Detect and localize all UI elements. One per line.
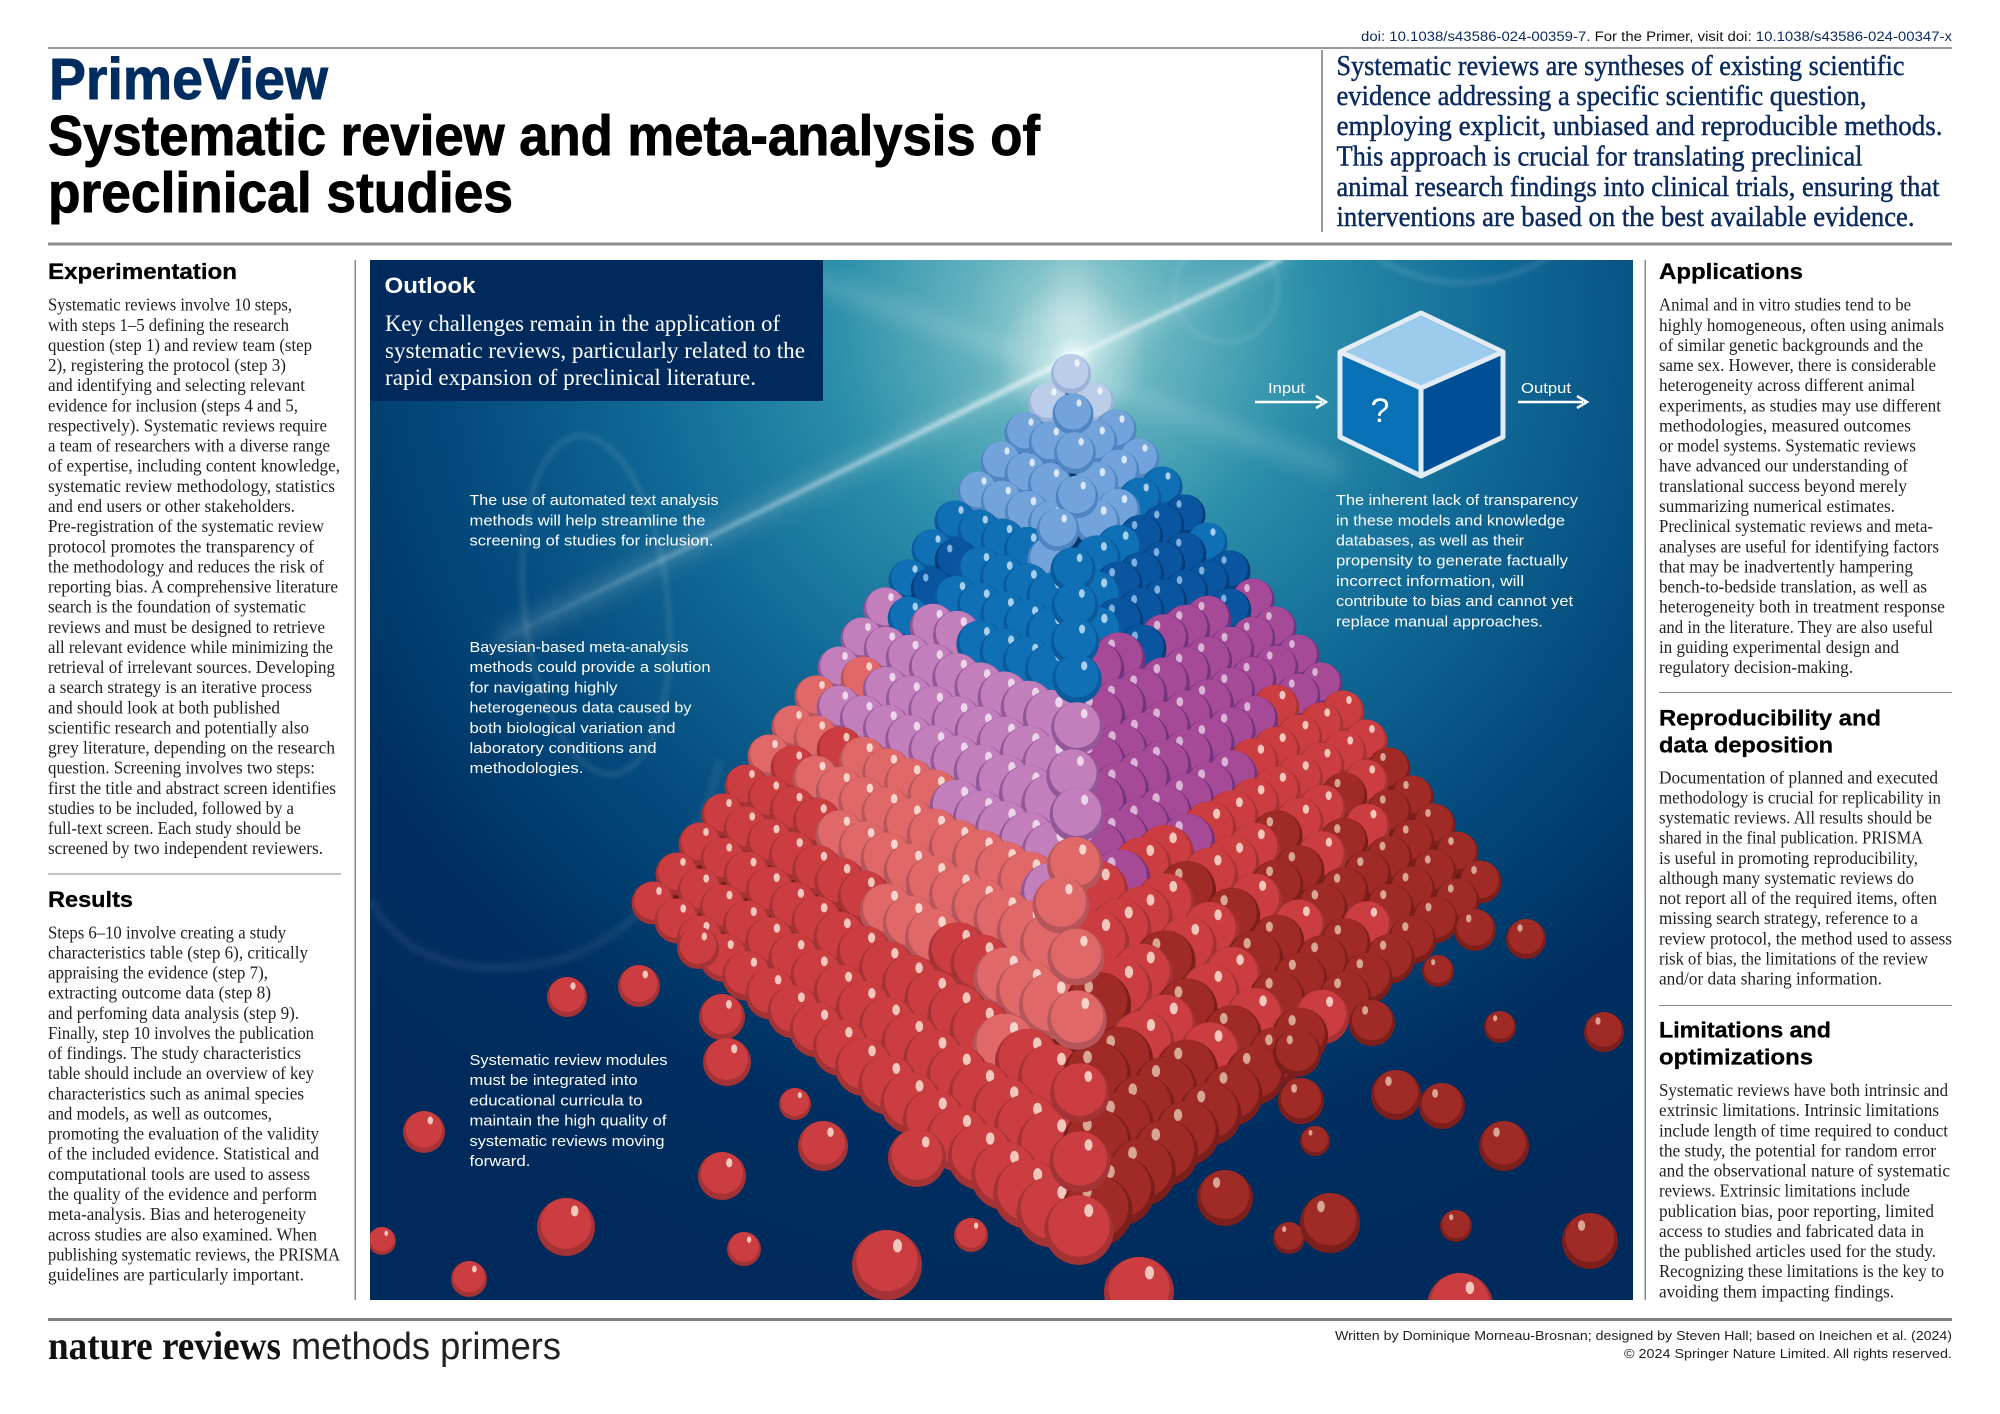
text: Experimentation: a team of researchers with a diverse range xyxy=(48,436,330,456)
summary text: interventions are based on the best available evidence. xyxy=(1336,202,1914,233)
text: Applications: methodologies, measured outcomes xyxy=(1659,416,1911,436)
annotation: Bayesian meta-analysis: laboratory conditions and xyxy=(470,740,656,757)
text: Experimentation: and should look at both published xyxy=(48,697,280,717)
text: Experimentation: a search strategy is an iterative process xyxy=(48,677,312,697)
kicker: PrimeView: PrimeView xyxy=(49,47,329,112)
black box icon xyxy=(1340,313,1503,476)
annotation: Bayesian meta-analysis: methods could provide a solution xyxy=(470,659,710,676)
text: Experimentation: reporting bias. A comprehensive literature xyxy=(48,576,338,596)
annotation: Bayesian meta-analysis: methodologies. xyxy=(470,760,584,777)
text: Experimentation: evidence for inclusion (steps 4 and 5, xyxy=(48,395,298,415)
text: Applications: analyses are useful for identifying factors xyxy=(1659,536,1939,556)
heading: Reproducibility and data deposition xyxy=(1659,706,1881,758)
left column xyxy=(48,259,341,1284)
heading: Experimentation: Experimentation xyxy=(48,259,237,284)
text: Applications: heterogeneity across different animal xyxy=(1659,375,1915,395)
text: Limitations: the study, the potential for random error xyxy=(1659,1140,1936,1160)
annotation: lack of transparency: incorrect information, will xyxy=(1336,573,1524,590)
text: Experimentation: retrieval of irrelevant sources. Developing xyxy=(48,657,335,677)
annotation: educational curricula: Systematic review modules xyxy=(470,1052,668,1069)
text: Limitations: and the observational nature of systematic xyxy=(1659,1160,1950,1180)
text: Experimentation: full-text screen. Each study should be xyxy=(48,818,301,838)
annotation: Bayesian meta-analysis: for navigating highly xyxy=(470,679,618,696)
footer credits: © 2024 Springer Nature Limited. All rights reserved. xyxy=(1624,1346,1952,1361)
text: Reproducibility: methodology is crucial for replicability in xyxy=(1659,787,1941,807)
annotation: automated text analysis: methods will help streamline the xyxy=(470,512,706,529)
main title: Systematic review and meta-analysis of xyxy=(48,104,1041,168)
footer logo: nature reviews xyxy=(48,1323,281,1368)
annotation: educational curricula xyxy=(470,1052,668,1170)
light rays and rings xyxy=(370,238,1560,968)
text: Reproducibility: Documentation of planned and executed xyxy=(1659,767,1938,787)
front ridge spheres xyxy=(1033,354,1114,1265)
black box icon: ? xyxy=(1371,392,1389,430)
heading: Applications: Applications xyxy=(1659,259,1803,284)
text: Experimentation: all relevant evidence while minimizing the xyxy=(48,637,333,657)
text: Reproducibility: shared in the final publication. PRISMA xyxy=(1659,828,1923,848)
text: Limitations: publication bias, poor reporting, limited xyxy=(1659,1201,1934,1221)
text: Results: of findings. The study characteristics xyxy=(48,1043,301,1063)
text: Experimentation: Pre-registration of the systematic review xyxy=(48,516,324,536)
text: Experimentation: first the title and abstract screen identifies xyxy=(48,778,336,798)
heading: Results: Results xyxy=(48,887,133,912)
annotation: lack of transparency: The inherent lack of transparency xyxy=(1336,492,1579,509)
text: Experimentation: studies to be included, followed by a xyxy=(48,798,294,818)
heading: Limitations and optimizations: Limitations and xyxy=(1659,1018,1831,1043)
text: Experimentation: with steps 1–5 defining the research xyxy=(48,315,289,335)
summary text: This approach is crucial for translating preclinical xyxy=(1336,142,1863,172)
text: Experimentation: question (step 1) and review team (step xyxy=(48,335,312,355)
text: Applications: experiments, as studies may use different xyxy=(1659,395,1941,415)
text: Results: computational tools are used to assess xyxy=(48,1164,310,1184)
output label and arrow xyxy=(1518,380,1587,408)
text: Limitations: Systematic reviews have both intrinsic and xyxy=(1659,1080,1948,1100)
annotation: educational curricula: must be integrated into xyxy=(470,1072,638,1089)
text: Limitations: avoiding them impacting findings. xyxy=(1659,1281,1894,1301)
text: Experimentation: reviews and must be designed to retrieve xyxy=(48,617,325,637)
text: Results: of the included evidence. Statistical and xyxy=(48,1144,319,1164)
text: Results: promoting the evaluation of the validity xyxy=(48,1124,319,1144)
text: Results: table should include an overview of key xyxy=(48,1063,314,1083)
annotation: Bayesian meta-analysis xyxy=(470,639,710,777)
panel background xyxy=(370,260,1633,1300)
text: Reproducibility: review protocol, the method used to assess xyxy=(1659,928,1952,948)
annotation: educational curricula: maintain the high quality of xyxy=(470,1113,667,1130)
text: Results: and models, as well as outcomes, xyxy=(48,1104,272,1124)
annotation: Bayesian meta-analysis: Bayesian-based meta-analysis xyxy=(470,639,688,656)
text: Experimentation: 2), registering the protocol (step 3) xyxy=(48,355,286,375)
annotation: automated text analysis: The use of automated text analysis xyxy=(470,492,718,509)
text: Experimentation: screened by two independent reviewers. xyxy=(48,838,323,858)
annotation: lack of transparency: databases, as well as their xyxy=(1336,532,1524,550)
text: Applications: translational success beyond merely xyxy=(1659,476,1907,496)
text: Applications: of similar genetic backgrounds and the xyxy=(1659,335,1923,355)
text: Reproducibility xyxy=(1659,767,1952,989)
text: Applications: Animal and in vitro studies tend to be xyxy=(1659,295,1911,315)
outlook text xyxy=(385,311,805,391)
annotation: automated text analysis: screening of studies for inclusion. xyxy=(470,532,714,550)
annotation: Bayesian meta-analysis: both biological variation and xyxy=(470,720,676,737)
main title: preclinical studies xyxy=(48,161,513,225)
input label and arrow xyxy=(1255,380,1326,408)
text: Experimentation: scientific research and potentially also xyxy=(48,717,309,737)
text: Results: and perfoming data analysis (step 9). xyxy=(48,1003,299,1023)
text: Applications: and in the literature. They are also useful xyxy=(1659,617,1933,637)
text: Reproducibility: is useful in promoting reproducibility, xyxy=(1659,848,1918,868)
text: Experimentation: respectively). Systematic reviews require xyxy=(48,416,327,436)
text: Experimentation xyxy=(48,295,340,858)
annotation: lack of transparency: contribute to bias and cannot yet xyxy=(1336,593,1574,610)
text: Experimentation: search is the foundation of systematic xyxy=(48,597,306,617)
text: Experimentation: and identifying and selecting relevant xyxy=(48,375,305,395)
text: Applications: that may be inadvertently hampering xyxy=(1659,556,1913,576)
input label and arrow: Input xyxy=(1268,380,1306,397)
summary text xyxy=(1336,51,1942,233)
footer logo xyxy=(48,1323,561,1368)
text: Results: the quality of the evidence and perform xyxy=(48,1184,317,1204)
text: Results: publishing systematic reviews, the PRISMA xyxy=(48,1244,340,1264)
output label and arrow: Output xyxy=(1521,380,1572,397)
heading: Limitations and optimizations xyxy=(1659,1018,1831,1070)
text: Results: Finally, step 10 involves the publication xyxy=(48,1023,314,1043)
text: Reproducibility: systematic reviews. All results should be xyxy=(1659,808,1932,828)
text: Applications: in guiding experimental design and xyxy=(1659,637,1899,657)
text: Applications: Preclinical systematic reviews and meta- xyxy=(1659,516,1933,536)
text: Experimentation: protocol promotes the transparency of xyxy=(48,536,314,556)
text: Reproducibility: risk of bias, the limitations of the review xyxy=(1659,948,1928,968)
text: Applications: heterogeneity both in treatment response xyxy=(1659,597,1945,617)
text: Reproducibility: and/or data sharing information. xyxy=(1659,969,1882,989)
outlook text: systematic reviews, particularly related to the xyxy=(385,338,805,364)
text: Applications: have advanced our understanding of xyxy=(1659,456,1908,476)
outlook box xyxy=(370,260,823,401)
annotation: lack of transparency xyxy=(1336,492,1579,630)
text: Results xyxy=(48,922,340,1284)
text: Reproducibility: missing search strategy, reference to a xyxy=(1659,908,1918,928)
summary text: animal research findings into clinical trials, ensuring that xyxy=(1336,172,1940,203)
red layers xyxy=(632,690,1502,1247)
right column xyxy=(1659,259,1952,1301)
text: Experimentation: question. Screening involves two steps: xyxy=(48,758,315,778)
pyramid of spheres xyxy=(632,354,1502,1265)
text: Applications: summarizing numerical estimates. xyxy=(1659,496,1895,516)
text: Results: Steps 6–10 involve creating a study xyxy=(48,922,286,942)
text: Experimentation: grey literature, depending on the research xyxy=(48,738,335,758)
outlook text: rapid expansion of preclinical literature. xyxy=(385,365,756,391)
annotation: lack of transparency: replace manual approaches. xyxy=(1336,613,1543,630)
text: Applications xyxy=(1659,295,1945,677)
text: Results: characteristics such as animal species xyxy=(48,1083,304,1103)
text: Applications: highly homogeneous, often using animals xyxy=(1659,315,1944,335)
text: Limitations xyxy=(1659,1080,1950,1301)
text: Limitations: the published articles used for the study. xyxy=(1659,1241,1936,1261)
text: Experimentation: and end users or other stakeholders. xyxy=(48,496,295,516)
footer logo: methods primers xyxy=(291,1326,561,1368)
annotation: automated text analysis xyxy=(470,492,718,550)
summary text: Systematic reviews are syntheses of existing scientific xyxy=(1336,51,1904,82)
summary text: evidence addressing a specific scientific question, xyxy=(1336,81,1866,112)
title block xyxy=(48,47,1041,225)
footer credits: Written by Dominique Morneau-Brosnan; designed by Steven Hall; based on Ineichen et al. (2024) xyxy=(1335,1328,1952,1343)
outlook text: Key challenges remain in the application of xyxy=(385,311,780,337)
annotation: lack of transparency: propensity to generate factually xyxy=(1336,553,1569,570)
text: Results: across studies are also examined. When xyxy=(48,1224,317,1244)
text: Results: guidelines are particularly important. xyxy=(48,1264,304,1284)
heading: Reproducibility and data deposition: data deposition xyxy=(1659,732,1833,758)
text: Results: characteristics table (step 6), critically xyxy=(48,942,308,962)
annotation: educational curricula: educational curricula to xyxy=(470,1092,642,1109)
text: Experimentation: of expertise, including content knowledge, xyxy=(48,456,340,476)
text: Applications: or model systems. Systematic reviews xyxy=(1659,436,1916,456)
annotation: educational curricula: systematic reviews moving xyxy=(470,1133,664,1150)
heading: Reproducibility and data deposition: Reproducibility and xyxy=(1659,706,1881,731)
summary text: employing explicit, unbiased and reproducible methods. xyxy=(1336,111,1942,142)
text: Reproducibility: although many systematic reviews do xyxy=(1659,868,1914,888)
footer credits xyxy=(1335,1328,1952,1361)
text: Results: extracting outcome data (step 8) xyxy=(48,983,271,1003)
text: Limitations: access to studies and fabricated data in xyxy=(1659,1221,1924,1241)
text: Experimentation: the methodology and reduces the risk of xyxy=(48,556,324,576)
annotation: lack of transparency: in these models and knowledge xyxy=(1336,512,1565,529)
text: Results: meta-analysis. Bias and heterogeneity xyxy=(48,1204,306,1224)
outlook heading: Outlook xyxy=(384,273,476,298)
text: Experimentation: systematic review methodology, statistics xyxy=(48,476,335,496)
text: Applications: bench-to-bedside translation, as well as xyxy=(1659,576,1927,596)
text: Limitations: extrinsic limitations. Intrinsic limitations xyxy=(1659,1100,1939,1120)
blue layers xyxy=(888,382,1250,658)
annotation: Bayesian meta-analysis: heterogeneous data caused by xyxy=(470,700,692,717)
text: Applications: same sex. However, there is considerable xyxy=(1659,355,1936,375)
doi line: doi: 10.1038/s43586-024-00359-7. For the Primer, visit doi: 10.1038/s43586-024-00347-x xyxy=(1361,29,1952,44)
purple layers xyxy=(794,578,1342,834)
text: Limitations: include length of time required to conduct xyxy=(1659,1120,1948,1140)
text: Limitations: reviews. Extrinsic limitations include xyxy=(1659,1181,1910,1201)
annotation: educational curricula: forward. xyxy=(470,1153,530,1170)
text: Experimentation: Systematic reviews involve 10 steps, xyxy=(48,295,292,315)
main title xyxy=(48,104,1041,225)
text: Limitations: Recognizing these limitations is the key to xyxy=(1659,1261,1944,1281)
loose red spheres xyxy=(368,909,1624,1339)
heading: Limitations and optimizations: optimizations xyxy=(1659,1044,1813,1070)
text: Results: appraising the evidence (step 7), xyxy=(48,963,268,983)
panel: outlook illustration xyxy=(368,238,1633,1339)
text: Applications: regulatory decision-making. xyxy=(1659,657,1853,677)
text: Reproducibility: not report all of the required items, often xyxy=(1659,888,1937,908)
